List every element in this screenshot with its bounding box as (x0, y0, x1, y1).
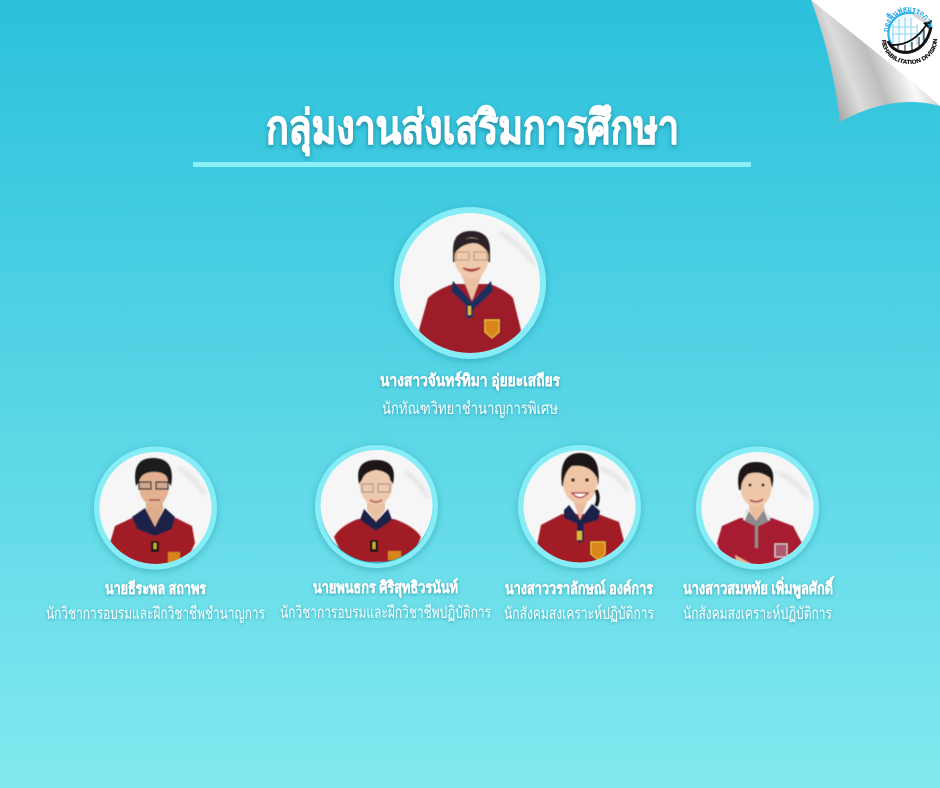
portrait ring (394, 207, 546, 359)
portrait (419, 231, 535, 360)
name: person 2: นายพนธกร ศิริสุทธิวรนันท์ (313, 578, 458, 598)
person: head of group (394, 207, 546, 360)
person 1 portrait (94, 446, 217, 570)
person 3 portrait (518, 445, 641, 568)
logo: rehabilitation division (882, 6, 938, 64)
name: person 4: นางสาวสมหทัย เพิ่มพูลศักดิ์ (683, 576, 835, 600)
role: head of group: นักทัณฑวิทยาชำนาญการพิเศษ (382, 399, 558, 418)
role: person 1: นักวิชาการอบรมและฝึกวิชาชีพชำนาญการ (46, 604, 265, 623)
logo: rehabilitation division: กองฟื้นฟูสมรรถภาพ (884, 6, 933, 32)
role: person 2: นักวิชาการอบรมและฝึกวิชาชีพปฏิบัติการ (280, 603, 491, 622)
title: กลุ่มงานส่งเสริมการศึกษา (266, 101, 679, 156)
name: person 1: นายธีระพล สถาพร (105, 579, 206, 598)
person 2 portrait (315, 445, 438, 568)
name: person 3: นางสาววราลักษณ์ องค์การ (505, 579, 653, 598)
name: head of group: นางสาวจันทร์ทิมา อุ่ยยะเสถียร (380, 371, 560, 391)
role: person 3: นักสังคมสงเคราะห์ปฏิบัติการ (504, 604, 654, 623)
title underline (193, 162, 751, 167)
logo: rehabilitation division: REHABILITATION DIVISION (882, 38, 938, 64)
person 4 portrait (696, 446, 819, 570)
page curl corner (811, 0, 940, 122)
role: person 4: นักสังคมสงเคราะห์ปฏิบัติการ (683, 604, 832, 623)
